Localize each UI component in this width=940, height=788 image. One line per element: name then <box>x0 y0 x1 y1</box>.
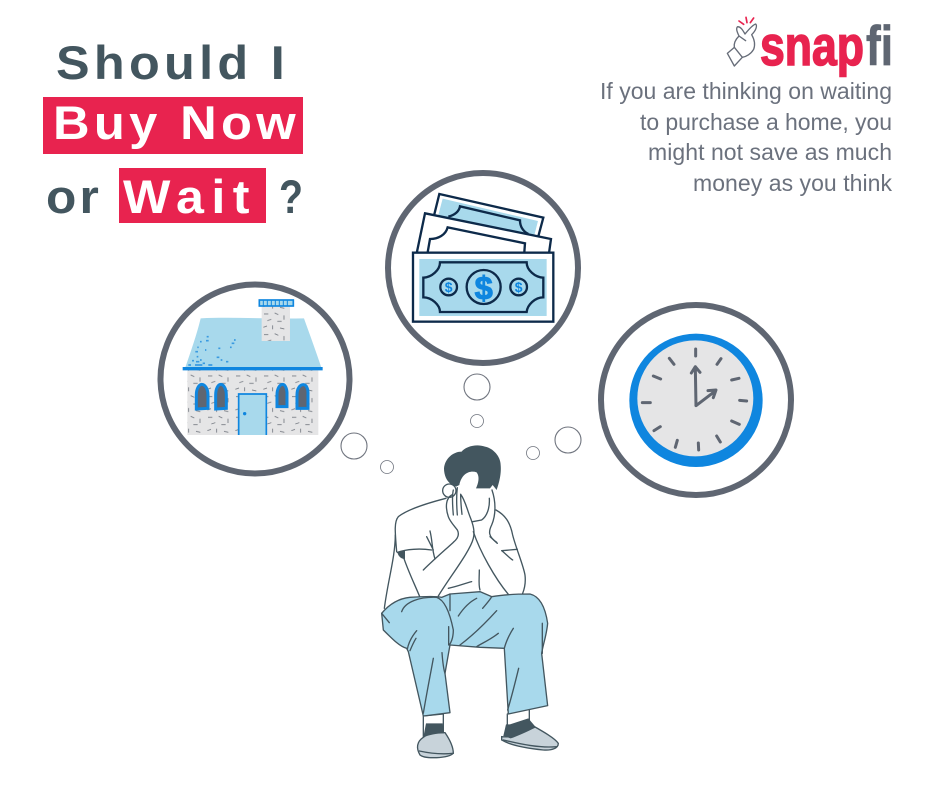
left slipper <box>418 733 453 758</box>
icon: snapping fingers <box>727 17 756 66</box>
text block: intro copy: If you are thinking on waiting <box>600 78 892 104</box>
front banknote <box>413 253 553 322</box>
socks <box>423 714 443 737</box>
panel: clock thought bubble <box>601 305 791 495</box>
shirt <box>384 498 547 612</box>
logo: snapfi <box>727 14 893 77</box>
panel: house thought bubble <box>160 284 350 474</box>
face and ear <box>457 473 494 521</box>
windows <box>196 384 308 409</box>
thought bubbles <box>341 374 581 474</box>
icon: banknotes: $ <box>515 279 523 295</box>
title <box>43 36 303 223</box>
text block: intro copy: to purchase a home, you <box>640 109 892 135</box>
right slipper <box>502 726 558 750</box>
heading: or: or <box>46 170 102 223</box>
door <box>239 394 266 435</box>
house walls <box>187 369 318 435</box>
roof speckle <box>188 337 236 365</box>
panel: money thought bubble <box>388 173 578 363</box>
heading: Should I: Should I <box>56 36 289 89</box>
icon: banknotes <box>413 194 553 322</box>
trousers <box>382 592 548 716</box>
hair <box>444 445 501 490</box>
dollar signs: $ <box>475 269 493 306</box>
hands and forearms <box>423 495 458 570</box>
house roof <box>185 318 322 368</box>
highlight: Wait: Wait <box>123 170 257 223</box>
eaves <box>183 364 323 374</box>
clock hands <box>691 367 716 406</box>
man lower body <box>382 592 558 758</box>
wordmark: snap: snap <box>760 14 864 77</box>
icon: house <box>183 300 323 435</box>
highlight: Buy Now: Buy Now <box>53 96 300 149</box>
text block: intro copy <box>600 78 892 196</box>
heading: question mark: ? <box>279 170 303 223</box>
man upper body <box>384 445 547 612</box>
text block: intro copy: money as you think <box>693 170 892 196</box>
middle banknote <box>417 213 551 253</box>
illustration: worried man <box>382 445 558 758</box>
icon: clock <box>629 334 763 467</box>
clock ticks <box>642 349 747 450</box>
back banknote <box>433 194 543 240</box>
wordmark: fi: fi <box>866 14 893 77</box>
icon: banknotes: $ <box>445 279 453 295</box>
text block: intro copy: might not save as much <box>648 139 892 165</box>
chimney <box>262 305 290 341</box>
